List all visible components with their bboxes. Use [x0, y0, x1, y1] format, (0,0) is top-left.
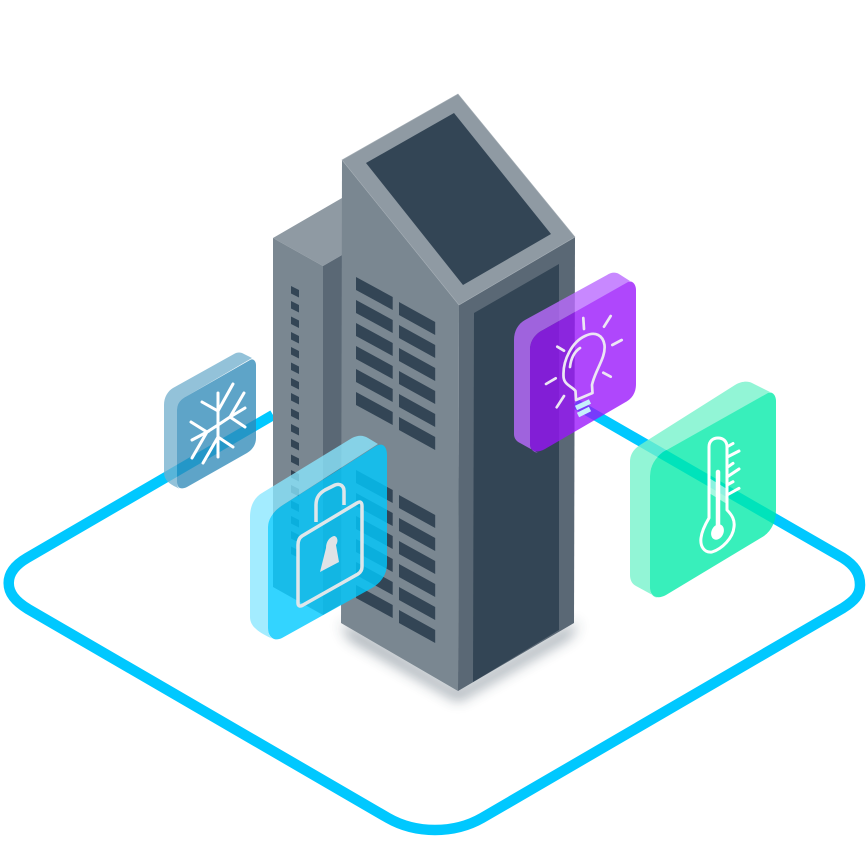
main tower — [341, 94, 575, 691]
tile: padlock — [250, 436, 387, 639]
roof — [342, 94, 575, 305]
back tower — [273, 198, 342, 615]
tile: snowflake — [164, 352, 256, 489]
roof skylight — [366, 113, 551, 285]
lower window group — [356, 470, 435, 643]
icon: light bulb — [546, 316, 622, 415]
building shadow — [341, 622, 578, 700]
tile: thermometer — [630, 382, 776, 598]
ring: blue rounded isometric base outline — [9, 404, 860, 830]
main tower left face — [341, 160, 459, 691]
upper window group — [356, 277, 435, 450]
back tower windows — [291, 286, 299, 558]
icon: snowflake — [191, 384, 245, 463]
main tower right face — [458, 237, 575, 691]
main tower dark glass panel — [473, 264, 559, 682]
icon: thermometer — [701, 438, 739, 552]
tile: light bulb — [514, 273, 636, 453]
icon: padlock — [298, 484, 362, 606]
